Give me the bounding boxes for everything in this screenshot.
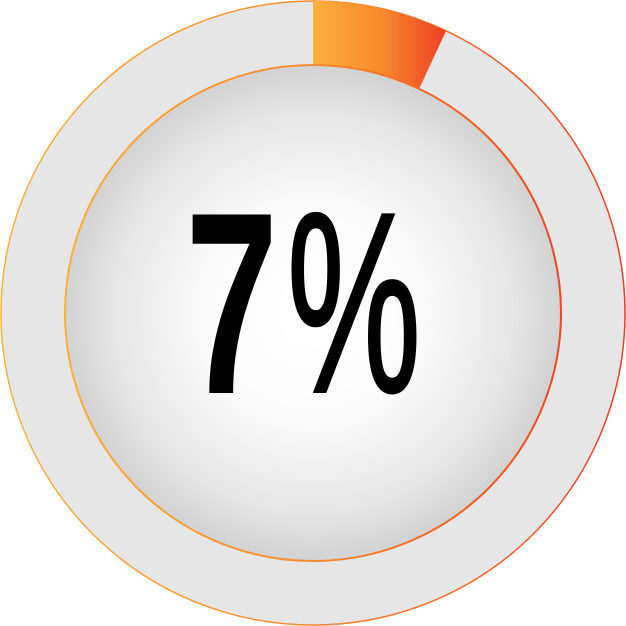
percent sign: % — [287, 159, 421, 446]
inner disc — [65, 65, 561, 561]
digit 7: 7 — [186, 160, 278, 449]
percentage value — [186, 159, 421, 449]
progress segment: 7 percent — [313, 1, 446, 89]
